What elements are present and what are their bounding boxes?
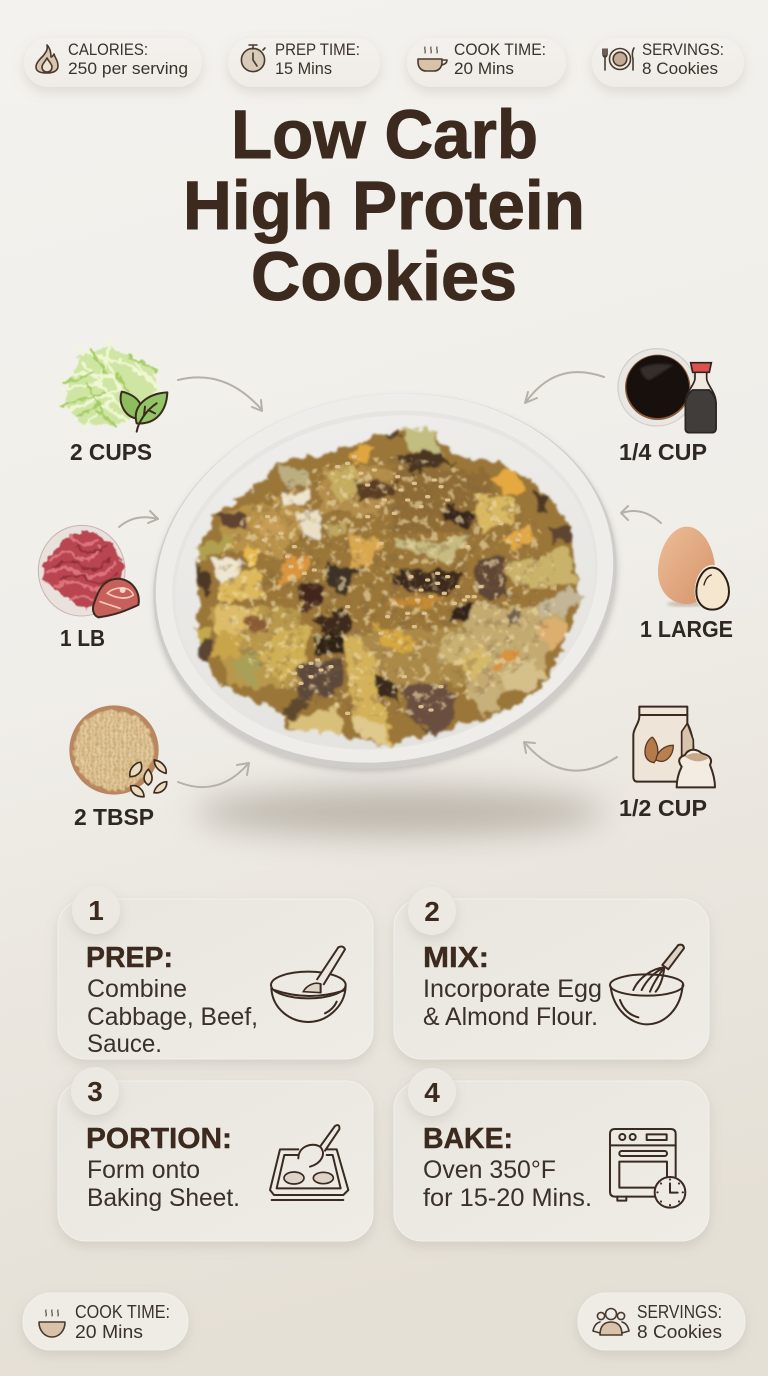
icon: group of people (593, 1308, 629, 1335)
text: cook time: COOK TIME: (75, 1301, 170, 1322)
plate (123, 357, 647, 805)
text: mix: MIX: (423, 942, 489, 974)
text: mix (423, 942, 602, 1031)
text: servings (637, 1301, 722, 1342)
title: High Protein (183, 167, 585, 244)
text: servings: SERVINGS: (642, 40, 724, 59)
icon: small egg (695, 565, 731, 612)
arrow: cabbage to plate (178, 377, 262, 411)
text: prep time (275, 40, 360, 78)
text: portion: Form onto (87, 1156, 200, 1184)
label: 2 tbsp: 2 TBSP (74, 804, 154, 830)
ingredient: shredded cabbage (60, 340, 167, 432)
badge 1: 1 (88, 895, 104, 926)
icon: plate and cutlery (603, 48, 634, 70)
label: 1 large: 1 LARGE (640, 616, 733, 642)
icon: flame (36, 45, 58, 73)
text: prep (86, 942, 258, 1058)
stat pill: calories (24, 38, 202, 87)
title: Low Carb (231, 96, 538, 173)
icon: steaming bowl (418, 47, 447, 71)
icon: steak (93, 579, 139, 617)
stat pill: prep time (228, 38, 380, 87)
label: 2 cups: 2 CUPS (70, 439, 152, 465)
ingredient: egg (658, 527, 731, 612)
icon: leaves (121, 392, 167, 432)
text: servings (642, 40, 724, 78)
text: prep: PREP: (86, 942, 173, 974)
text: prep time: 15 Mins (275, 59, 332, 78)
title (183, 96, 585, 315)
text: cook time: COOK TIME: (454, 40, 546, 59)
icon: baking sheet and scoop (270, 1125, 348, 1200)
text: portion: Baking Sheet. (87, 1184, 240, 1212)
ingredient: almond flour (633, 707, 715, 787)
label: 1/4 cup: 1/4 CUP (619, 439, 707, 465)
badge 2: 2 (424, 896, 440, 927)
text: servings: SERVINGS: (637, 1301, 722, 1322)
text: prep time: PREP TIME: (275, 40, 360, 59)
text: cook time: 20 Mins (75, 1321, 143, 1342)
badge 1 (72, 886, 120, 934)
food (193, 428, 583, 747)
badge 2 (408, 887, 456, 935)
text: servings: 8 Cookies (637, 1321, 722, 1342)
text: cook time (454, 40, 546, 78)
text: portion (86, 1123, 240, 1212)
text: calories: CALORIES: (68, 40, 148, 59)
text: cook time (75, 1301, 170, 1342)
step card 2: mix (394, 887, 709, 1059)
stat pill: servings (592, 38, 744, 87)
icon: stopwatch (241, 45, 265, 72)
ingredient: sesame seeds (69, 705, 167, 797)
badge 4 (408, 1068, 456, 1116)
ingredient: soy sauce (618, 349, 716, 433)
text: cook time: 20 Mins (454, 59, 514, 78)
text: bake: Oven 350°F (423, 1156, 556, 1184)
icon: oven and clock (610, 1129, 685, 1208)
text: prep: Sauce. (87, 1030, 162, 1058)
badge 3: 3 (87, 1076, 103, 1107)
title: Cookies (251, 238, 517, 315)
arrow: beef to plate (119, 511, 158, 527)
icon: seeds (130, 760, 167, 797)
text: servings: 8 Cookies (642, 59, 718, 78)
text: portion: PORTION: (86, 1123, 232, 1155)
icon: soy bottle (685, 363, 716, 433)
footer pill: cook time (23, 1293, 188, 1350)
arrow: egg to plate (621, 506, 661, 523)
icon: bowl and spoon (271, 947, 346, 1022)
text: bake (423, 1123, 592, 1212)
label: 1/2 cup: 1/2 CUP (619, 795, 707, 821)
text: mix: & Almond Flour. (423, 1003, 598, 1031)
arrow: sesame to plate (178, 763, 249, 787)
icon: steaming bowl (39, 1310, 65, 1337)
ingredient: ground beef (38, 525, 139, 617)
text: prep: Combine (87, 975, 187, 1003)
footer pill: servings (578, 1293, 745, 1350)
text: bake: for 15-20 Mins. (423, 1184, 592, 1212)
label: 1 lb: 1 LB (60, 625, 105, 651)
step card 4: bake (394, 1068, 709, 1241)
plate of cabbage and beef (123, 357, 647, 805)
text: calories: 250 per serving (68, 59, 188, 78)
icon: bowl and whisk (610, 945, 684, 1024)
step card 3: portion (58, 1067, 373, 1241)
arrow: almond flour to plate (524, 742, 617, 771)
arrow: soy sauce to plate (525, 372, 604, 403)
text: bake: BAKE: (423, 1123, 513, 1155)
text: calories (68, 40, 188, 78)
text: mix: Incorporate Egg (423, 975, 602, 1003)
badge 4: 4 (424, 1077, 440, 1108)
badge 3 (71, 1067, 119, 1115)
plate shadow (195, 788, 605, 836)
text: prep: Cabbage, Beef, (87, 1003, 258, 1031)
icon: flour sack (677, 750, 715, 787)
step card 1: prep (58, 886, 373, 1059)
stat pill: cook time (407, 38, 566, 87)
